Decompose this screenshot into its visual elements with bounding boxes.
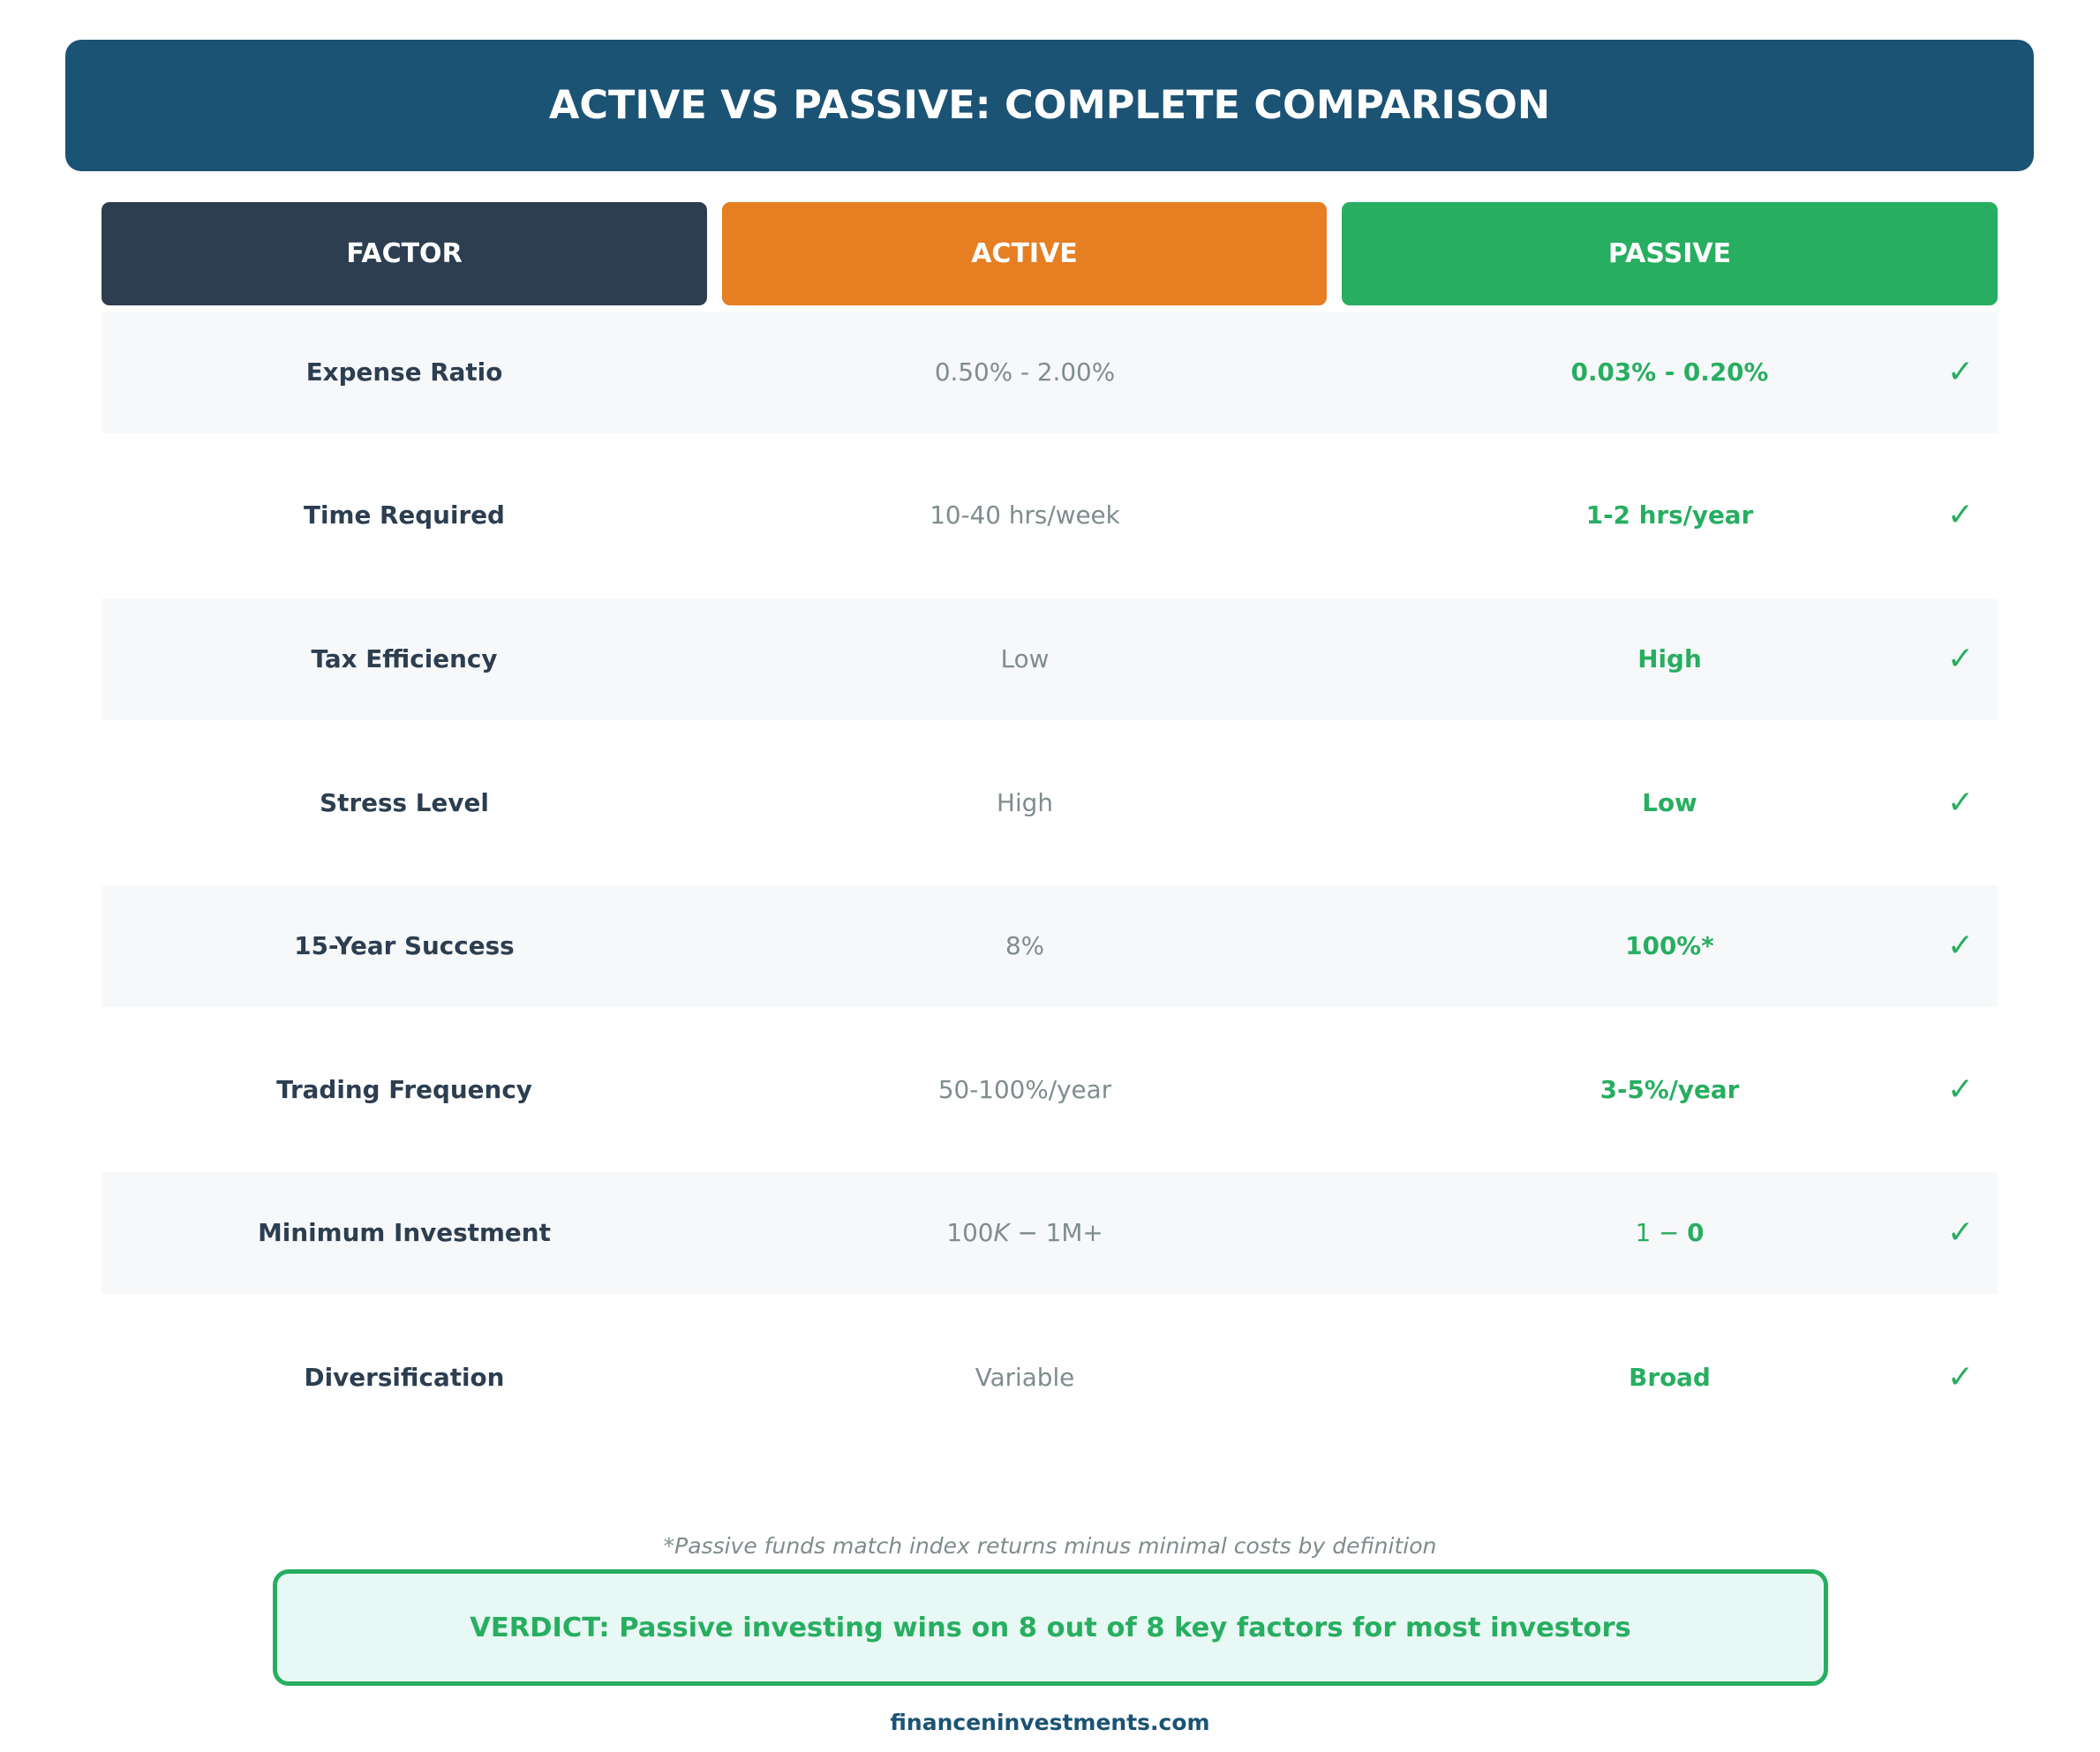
row: minimum investment: 1 − 0 xyxy=(1635,1218,1704,1247)
row: diversification: Variable xyxy=(975,1363,1074,1392)
row: stress level: High xyxy=(997,788,1053,817)
row: time required: 1-2 hrs/year xyxy=(1586,500,1753,530)
row: time required: Time Required xyxy=(304,500,505,530)
verdict box: VERDICT: Passive investing wins on 8 out of 8 key factors for most investors xyxy=(470,1612,1631,1643)
header: passive: PASSIVE xyxy=(1608,238,1731,269)
row: tax efficiency xyxy=(311,641,1974,677)
row: time required xyxy=(304,497,1974,533)
header: factor: FACTOR xyxy=(346,238,463,269)
row: trading frequency: ✓ xyxy=(1947,1072,1974,1108)
row: stress level: Low xyxy=(1642,788,1697,817)
row: expense ratio: 0.03% - 0.20% xyxy=(1571,357,1768,387)
title: ACTIVE VS PASSIVE: COMPLETE COMPARISON xyxy=(549,83,1550,128)
row: diversification: Diversification xyxy=(305,1363,504,1392)
verdict box xyxy=(273,1569,1828,1686)
footnote: *Passive funds match index returns minus minimal costs by definition xyxy=(664,1533,1436,1559)
row: tax efficiency: High xyxy=(1637,644,1702,673)
footer: financeninvestments.com xyxy=(890,1710,1210,1735)
row: minimum investment: 100K − 1M+ xyxy=(946,1218,1103,1247)
row: 15-year success xyxy=(294,928,1974,964)
row: stress level: Stress Level xyxy=(320,788,489,817)
title xyxy=(65,40,2034,171)
row: expense ratio xyxy=(306,354,1974,390)
header: factor xyxy=(102,202,707,305)
row: trading frequency xyxy=(276,1072,1974,1108)
row: 15-year success: 8% xyxy=(1005,931,1044,960)
row: time required: 10-40 hrs/week xyxy=(930,500,1120,530)
row: diversification: Broad xyxy=(1629,1363,1711,1392)
row: stress level xyxy=(320,785,1974,821)
row: stress level: ✓ xyxy=(1947,785,1974,821)
row: minimum investment: Minimum Investment xyxy=(258,1218,551,1247)
row: trading frequency: 3-5%/year xyxy=(1600,1075,1739,1104)
row: 15-year success: 100%* xyxy=(1625,931,1714,960)
row: tax efficiency: Tax Efficiency xyxy=(311,644,497,673)
row: expense ratio: Expense Ratio xyxy=(306,357,502,387)
row: tax efficiency: Low xyxy=(1001,644,1049,673)
row: trading frequency: Trading Frequency xyxy=(276,1075,532,1104)
header: active xyxy=(722,202,1327,305)
row: time required: ✓ xyxy=(1947,497,1974,533)
row: diversification: ✓ xyxy=(1947,1359,1974,1395)
row: trading frequency: 50-100%/year xyxy=(938,1075,1111,1104)
row: minimum investment xyxy=(258,1214,1974,1251)
row: expense ratio: 0.50% - 2.00% xyxy=(935,357,1115,387)
header: active: ACTIVE xyxy=(971,238,1078,269)
row: 15-year success: ✓ xyxy=(1947,928,1974,964)
row: 15-year success: 15-Year Success xyxy=(294,931,515,960)
row: diversification xyxy=(305,1359,1974,1395)
row: expense ratio: ✓ xyxy=(1947,354,1974,390)
header: passive xyxy=(1342,202,1998,305)
row: tax efficiency: ✓ xyxy=(1947,641,1974,677)
row: minimum investment: ✓ xyxy=(1947,1214,1974,1251)
